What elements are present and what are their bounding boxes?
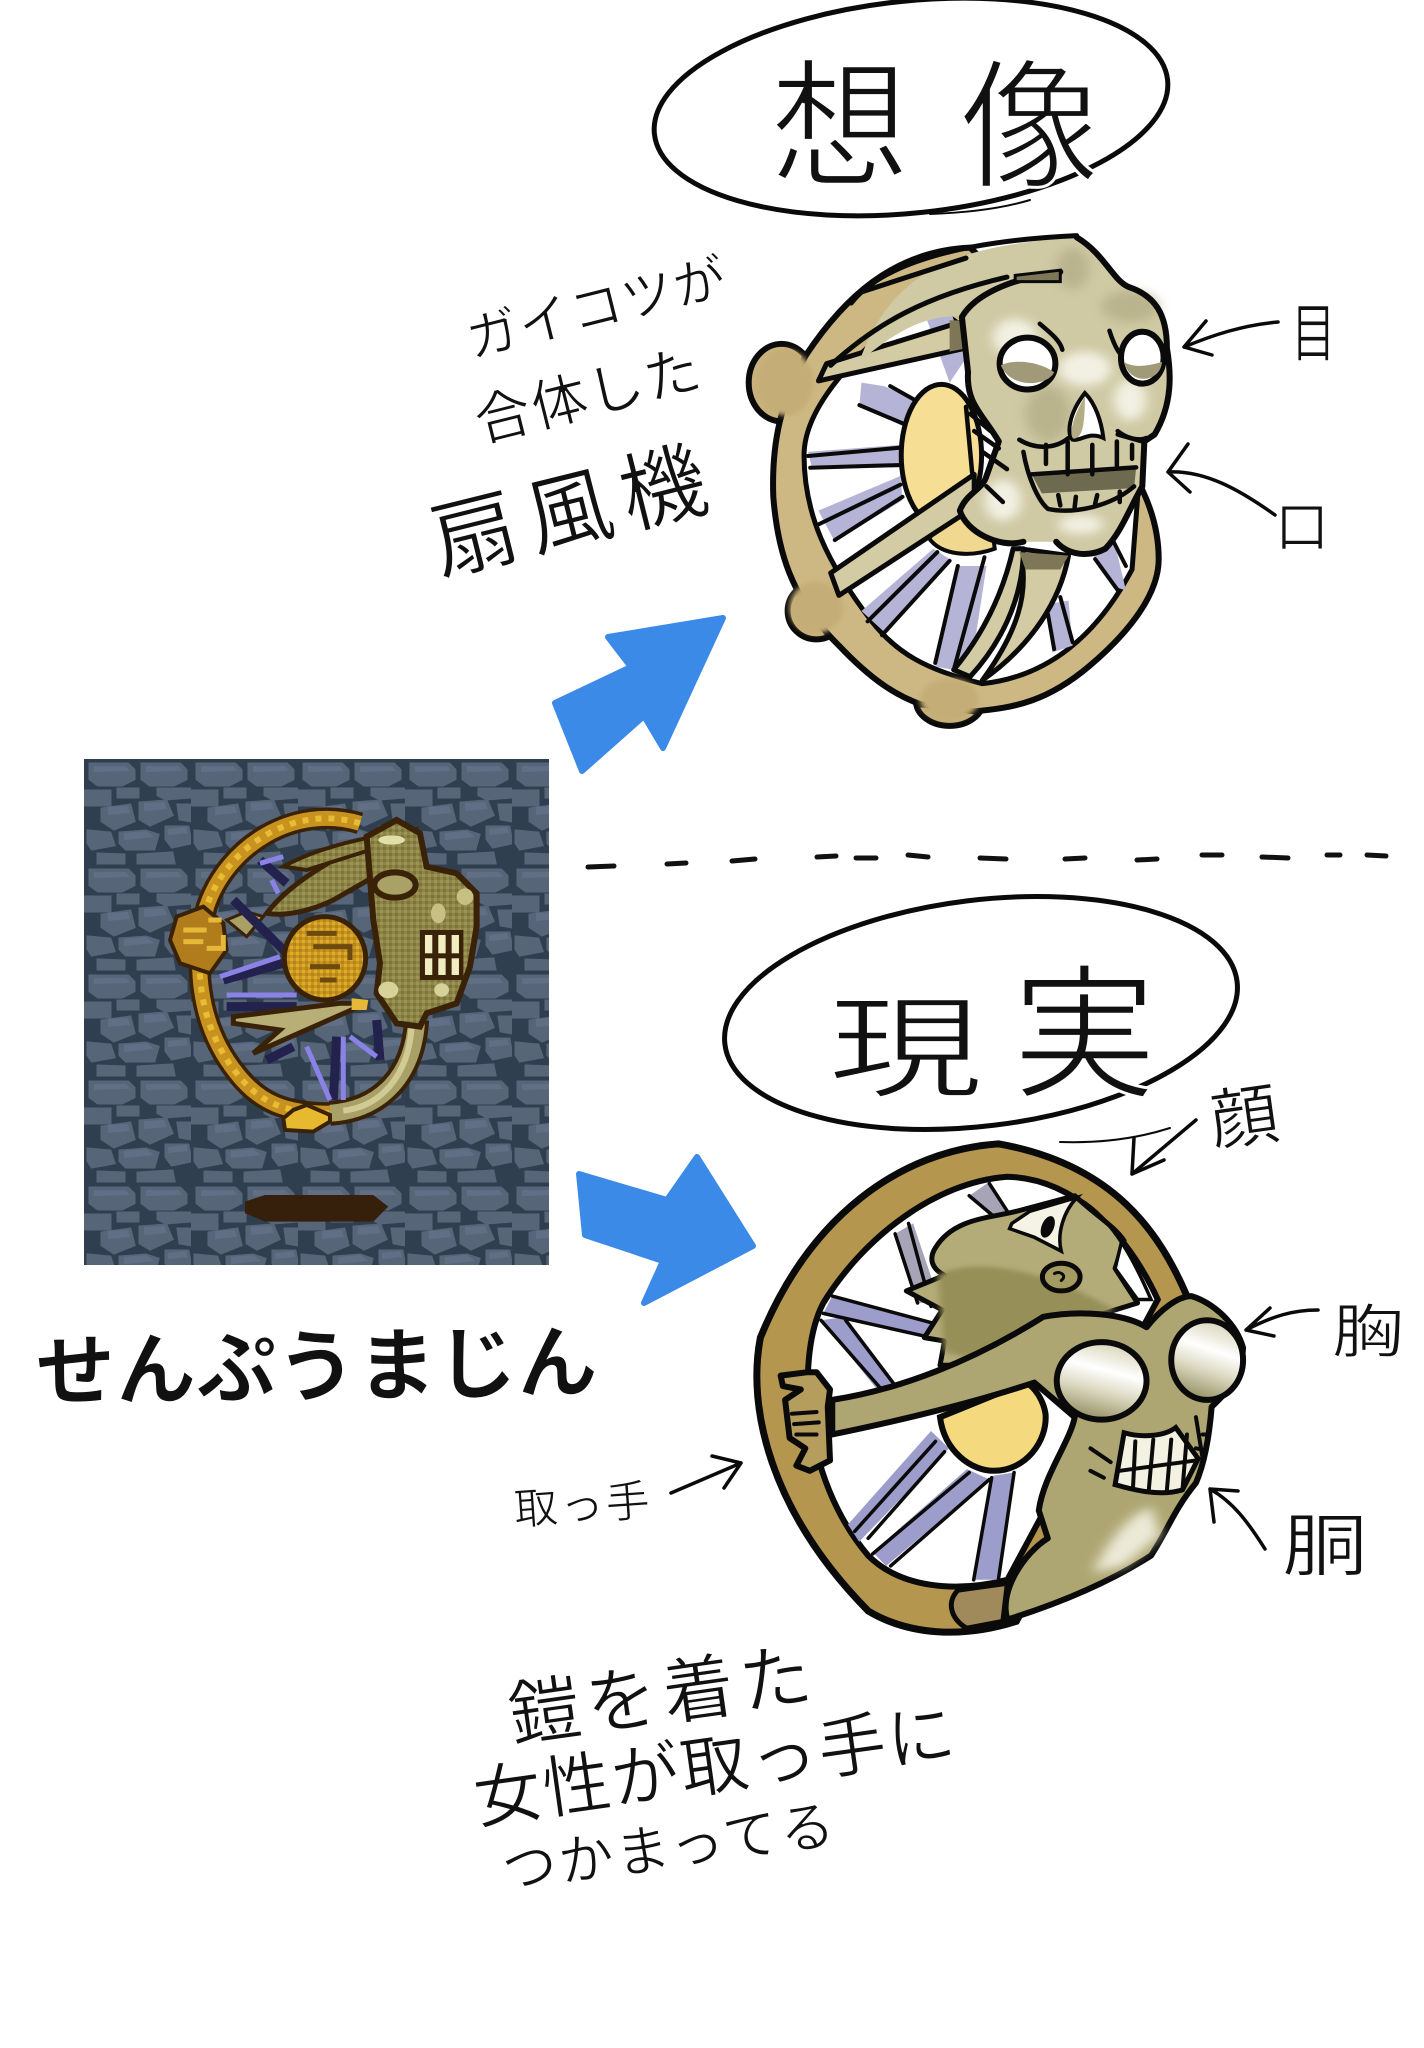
knob outlines xyxy=(749,344,983,726)
text: armored woman note: 女性が取っ手に xyxy=(469,1695,960,1838)
label: torso xyxy=(1210,1489,1368,1585)
bones xyxy=(818,320,1068,680)
eyes xyxy=(1000,338,1055,390)
skull outline xyxy=(960,237,1170,554)
label: eye xyxy=(1184,298,1336,370)
body and arm xyxy=(832,1296,1243,1620)
heading: reality bubble: 現 xyxy=(828,987,983,1112)
illustration: actual fan with armored woman xyxy=(757,1144,1243,1632)
ring knob patches xyxy=(758,350,979,720)
chest skull teeth xyxy=(1115,1428,1198,1493)
text: armored woman note xyxy=(458,1617,969,1904)
skull shading xyxy=(984,248,1159,534)
armor cups xyxy=(1057,1342,1147,1420)
label: mouth: 口 xyxy=(1275,498,1329,558)
leg base xyxy=(951,1583,1007,1628)
skull fill with crown bone xyxy=(859,237,1170,554)
heading: imagination bubble: 想像 xyxy=(770,49,1100,206)
bones xyxy=(233,1003,367,1053)
arrow: down to reality xyxy=(579,1157,753,1303)
hub xyxy=(284,917,366,1000)
hand on handle xyxy=(781,1372,830,1471)
panel: game sprite screenshot xyxy=(84,759,549,1265)
sprite name: せんぷうまじん xyxy=(35,1318,598,1417)
text: skeleton fan note: 扇風機 xyxy=(422,432,717,593)
gold foot xyxy=(283,1105,330,1132)
heading: reality bubble: 実 xyxy=(1012,955,1157,1117)
text: skeleton fan note: ガイコツが xyxy=(461,249,732,369)
ring xyxy=(757,1144,1187,1632)
skull xyxy=(367,820,477,1027)
teeth xyxy=(420,930,463,980)
mouth xyxy=(1032,467,1136,493)
handle xyxy=(170,907,227,973)
heading: imagination bubble xyxy=(643,0,1179,239)
heading: reality bubble xyxy=(711,869,1251,1157)
text: armored woman note: 鎧を着た xyxy=(504,1636,817,1757)
ring xyxy=(773,248,1159,711)
label: face: 顔 xyxy=(1206,1076,1283,1161)
nose xyxy=(1069,393,1103,440)
sprite: fan demon xyxy=(170,818,477,1222)
shadow xyxy=(245,1195,388,1222)
illustration: imagined skull fan xyxy=(749,236,1170,726)
dashed divider xyxy=(588,855,1386,867)
hub xyxy=(940,1383,1046,1471)
arrow: up to imagination xyxy=(555,618,723,771)
label: face xyxy=(1132,1076,1283,1174)
hub xyxy=(901,384,982,526)
spokes xyxy=(821,1296,1014,1580)
label: chest xyxy=(1246,1300,1404,1365)
blue spokes xyxy=(220,857,377,1100)
label: chest: 胸 xyxy=(1332,1300,1404,1365)
label: eye: 目 xyxy=(1291,298,1336,370)
dark wheel interior xyxy=(223,860,380,1100)
label: mouth xyxy=(1168,444,1329,558)
text: armored woman note: つかまってる xyxy=(498,1794,838,1902)
hair and head xyxy=(906,1196,1138,1365)
ring pale xyxy=(330,1020,417,1113)
text: skeleton fan note xyxy=(380,249,783,593)
text: skeleton fan note: 合体した xyxy=(468,337,707,454)
label: handle xyxy=(512,1456,741,1535)
spokes xyxy=(808,294,1126,673)
label: torso: 胴 xyxy=(1282,1509,1368,1585)
label: handle: 取っ手 xyxy=(512,1477,651,1535)
ring gold xyxy=(200,818,360,1113)
